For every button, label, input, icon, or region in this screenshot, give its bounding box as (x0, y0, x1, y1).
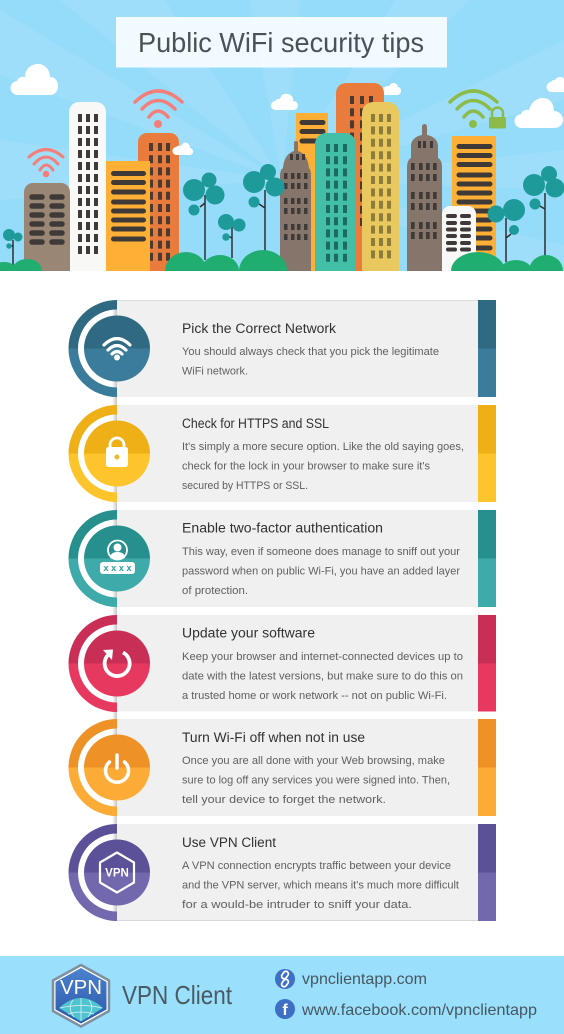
badge: vpn hexagon: VPN (105, 868, 129, 880)
title: Public WiFi security tips (138, 27, 424, 58)
body 4 (182, 651, 463, 702)
heading 5: Turn Wi-Fi off when not in use (182, 730, 365, 745)
badge: lock (68, 405, 150, 502)
icon: green wifi with lock (450, 91, 506, 128)
body 3: of protection. (182, 585, 248, 597)
badge: user and password (68, 510, 150, 607)
body 6: for a would-be intruder to sniff your data. (182, 899, 412, 911)
brand name: VPN Client (122, 980, 233, 1010)
badge: power (68, 719, 150, 816)
building: yellow back middle (296, 113, 328, 283)
building: orange tower left (138, 133, 179, 271)
body 5: tell your device to forget the network. (182, 794, 386, 806)
body 3 (182, 546, 460, 597)
building: white tall (69, 102, 106, 271)
strip 4 (478, 615, 496, 712)
building: small white (442, 206, 476, 271)
icon: facebook (275, 999, 295, 1019)
body 5: sure to log off any services you were signed into. Then, (182, 774, 450, 786)
tip 6: use vpn client (68, 824, 496, 921)
strip 3 (478, 510, 496, 607)
facebook link: www.facebook.com/vpnclientapp (301, 1002, 537, 1019)
panel spine shadow (112, 300, 117, 921)
building: yellow left (106, 161, 150, 276)
body 5 (182, 755, 450, 806)
heading 1: Pick the Correct Network (182, 321, 336, 336)
body 1: You should always check that you pick the legitimate (182, 346, 439, 358)
heading 4: Update your software (182, 626, 315, 640)
sky background with rays (0, 0, 564, 271)
strip 6 (478, 824, 496, 921)
header illustration: city skyline (0, 0, 564, 293)
body 1 (182, 346, 439, 378)
body 2: check for the lock in your browser to make sure it's (182, 460, 430, 472)
small cloud on orange tower (172, 143, 193, 155)
building: brown left (24, 183, 70, 271)
body 2 (182, 441, 464, 492)
strip 5 (478, 719, 496, 816)
tip 4: update your software (68, 615, 496, 712)
strip 2 (478, 405, 496, 502)
tip 1: pick the correct network (68, 300, 496, 397)
logo: vpn hexagon with globe (53, 965, 109, 1026)
body 6: A VPN connection encrypts traffic between your device (182, 860, 451, 872)
strip 1 (478, 300, 496, 397)
body 6: and the VPN server, which means it's much more difficult (182, 880, 460, 892)
tip 2: check for https and ssl (68, 405, 496, 502)
icon: small red wifi (29, 150, 63, 177)
website link: vpnclientapp.com (302, 971, 427, 988)
badge: vpn hexagon (68, 824, 150, 921)
building: teal (315, 133, 356, 271)
body 3: This way, even if someone does manage to sniff out your (182, 546, 460, 558)
building: brown tower right (407, 124, 442, 271)
heading 3: Enable two-factor authentication (182, 520, 383, 536)
footer band (0, 956, 564, 1034)
icon: link (275, 969, 295, 989)
tip 3: two-factor authentication (68, 510, 496, 607)
tip 5: turn wi-fi off (68, 719, 496, 816)
heading 6: Use VPN Client (182, 835, 276, 850)
icon: facebook: f (282, 1002, 288, 1019)
trees (3, 164, 564, 268)
body 2: secured by HTTPS or SSL. (182, 480, 308, 492)
badge: wifi (68, 300, 150, 397)
building: yellow right (452, 136, 496, 257)
heading 2: Check for HTTPS and SSL (182, 416, 329, 431)
badge: refresh (68, 615, 150, 712)
body 3: password when on public Wi-Fi, you have an added layer (182, 566, 460, 578)
body 2: It's simply a more secure option. Like the old saying goes, (182, 441, 464, 453)
building: orange back right (336, 83, 384, 271)
logo: vpn hexagon with globe: VPN (60, 977, 102, 999)
body 4: a trusted home or work network -- not on public Wi-Fi. (182, 690, 447, 702)
clouds (10, 64, 564, 128)
building: brown tower left of teal (280, 141, 311, 271)
icon: large red wifi (135, 91, 182, 128)
body 5: Once you are all done with your Web browsing, make (182, 755, 445, 767)
building: light yellow (362, 102, 399, 271)
body 4: Keep your browser and internet-connected devices up to (182, 651, 463, 663)
title (116, 17, 447, 68)
body 6 (182, 860, 460, 911)
body 4: date with the latest versions, but make sure to do this on (182, 670, 463, 682)
body 1: WiFi network. (182, 366, 248, 378)
green mounds (0, 250, 563, 271)
badge: user and password: xxxx (104, 563, 132, 573)
